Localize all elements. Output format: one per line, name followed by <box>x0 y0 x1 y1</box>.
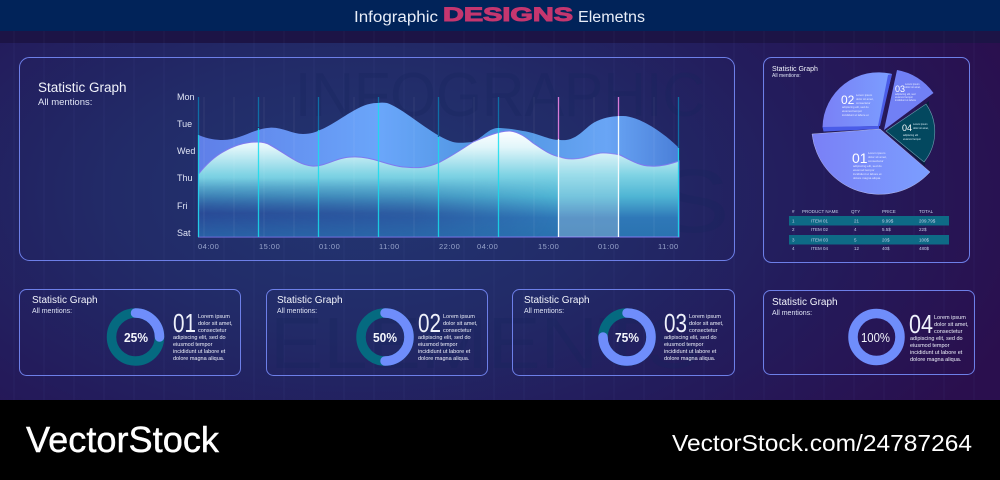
faint grid lines <box>204 97 654 237</box>
front area series <box>198 131 679 237</box>
donut 100% <box>853 314 900 360</box>
panel: statistic 02: All mentions: <box>277 308 317 315</box>
number and description <box>418 308 478 362</box>
data table: 100$ <box>919 238 930 242</box>
panel: statistic 04: All mentions: <box>772 310 812 317</box>
vertical time markers <box>198 97 678 237</box>
slice 01: Lorem ipsum <box>868 151 886 155</box>
number and description: Lorem ipsum <box>443 314 475 320</box>
y axis day labels <box>177 92 195 238</box>
slice 01: dolor sit amet, <box>868 155 887 159</box>
number and description <box>909 309 969 363</box>
data table: 209.79$ <box>919 218 936 224</box>
number and description: incididunt ut labore et <box>910 350 963 356</box>
header title: Infographic: Infographic <box>354 9 438 26</box>
x axis time labels: 01:00 <box>598 242 619 251</box>
data table: ITEM 04 <box>811 246 829 251</box>
data table: 9.99$ <box>882 218 894 224</box>
ghost background lettering: INFOGRAPHIC <box>295 61 705 130</box>
slice 03: 03 <box>895 84 905 94</box>
slice 02: Lorem ipsum <box>856 93 873 97</box>
data table: 1 <box>792 218 795 224</box>
number and description: dolor sit amet, <box>443 321 478 327</box>
slice 02: 02 <box>841 93 855 107</box>
heading: statistic graph: Statistic Graph <box>38 80 127 95</box>
number and description: Lorem ipsum <box>934 315 966 321</box>
footer brand: VectorStock <box>26 419 220 460</box>
number and description: incididunt ut labore et <box>664 349 717 355</box>
number and description: adipiscing elit, sed do <box>418 335 471 341</box>
number and description: consectetur <box>934 329 963 335</box>
x axis time labels: 15:00 <box>538 242 559 251</box>
slice 03 <box>884 70 934 130</box>
slice 03: Lorem ipsum <box>905 83 919 86</box>
y axis day labels: Wed <box>177 146 195 156</box>
data table: 12 <box>854 246 860 251</box>
number and description: 02 <box>418 308 441 338</box>
number and description: Lorem ipsum <box>198 314 230 320</box>
number and description: dolor sit amet, <box>198 321 233 327</box>
panel: statistic 01 <box>20 290 240 376</box>
subheading: all mentions: All mentions: <box>38 97 92 108</box>
number and description: dolor sit amet, <box>934 322 969 328</box>
ghost background lettering: DESIGNS <box>230 152 730 252</box>
slice 01: incididunt ut labore et <box>853 172 882 176</box>
data table <box>789 209 949 251</box>
footer url: VectorStock.com/24787264 <box>672 430 972 456</box>
slice 01: 01 <box>852 150 868 166</box>
number and description: dolore magna aliqua. <box>418 356 470 362</box>
panel: statistic 02 <box>266 290 488 376</box>
donut 25% <box>112 313 160 361</box>
y axis day labels: Tue <box>177 119 192 129</box>
x axis time labels: 11:00 <box>379 242 400 251</box>
data table: PRODUCT NAME <box>802 209 838 214</box>
donut 75% <box>603 313 651 361</box>
slice 04: adipiscing elit <box>903 134 918 137</box>
number and description: 01 <box>173 308 196 338</box>
highlighted section <box>559 153 618 237</box>
data table: PRICE <box>882 209 896 214</box>
lower shading <box>198 180 532 237</box>
x axis time labels: 11:00 <box>658 242 679 251</box>
slice 01: consectetur <box>868 159 884 163</box>
data table: 4 <box>854 227 857 232</box>
slice 04: dolor sit amet, <box>913 127 929 130</box>
data table: # <box>792 209 795 214</box>
slice 01: adipiscing elit, sed do <box>853 164 882 168</box>
x axis time labels: 04:00 <box>477 242 498 251</box>
slice 01: eiusmod tempor <box>853 168 875 172</box>
panel: statistic 03: All mentions: <box>524 308 564 315</box>
table row highlights <box>789 216 949 244</box>
slice 01: dolore magna aliqua. <box>853 176 881 180</box>
header title: Elemetns: Elemetns <box>578 9 645 26</box>
x axis time labels: 01:00 <box>319 242 340 251</box>
data table: QTY <box>851 209 860 214</box>
data table: 5 <box>854 238 857 242</box>
data table: 3 <box>792 238 795 242</box>
panel: statistic 03: Statistic Graph <box>524 295 590 306</box>
data table: 4 <box>792 246 795 251</box>
donut 100%: 100% <box>861 331 890 345</box>
slice 04: Lorem ipsum <box>913 123 927 126</box>
data table: 21 <box>854 218 860 224</box>
number and description: incididunt ut labore et <box>418 349 471 355</box>
data table: 2 <box>792 227 795 232</box>
panel: statistic 02: Statistic Graph <box>277 295 343 306</box>
number and description: consectetur <box>198 328 227 334</box>
y axis day labels: Fri <box>177 201 188 211</box>
panel: main statistic graph <box>20 58 734 260</box>
donut 50%: 50% <box>373 330 397 345</box>
data table: 22$ <box>919 227 927 232</box>
number and description <box>173 308 233 362</box>
donut 25%: 25% <box>124 330 148 345</box>
panel: statistic 01: All mentions: <box>32 308 72 315</box>
data table: ITEM 02 <box>811 227 829 232</box>
slice 04 <box>886 101 935 166</box>
x axis time labels: 15:00 <box>259 242 280 251</box>
data table: 480$ <box>919 246 930 251</box>
number and description <box>664 308 724 362</box>
ghost background lettering <box>230 61 730 384</box>
number and description: eiusmod tempor <box>418 342 458 348</box>
slice 03: incididunt ut labore <box>895 99 917 102</box>
header bar <box>0 0 1000 31</box>
data table: ITEM 03 <box>811 238 829 242</box>
number and description: eiusmod tempor <box>173 342 213 348</box>
donut 75%: 75% <box>615 330 639 345</box>
data table: TOTAL <box>919 209 934 214</box>
number and description: consectetur <box>689 328 718 334</box>
panel: statistic 03 <box>512 290 734 376</box>
donut 50% <box>361 313 409 361</box>
y axis day labels: Thu <box>177 173 193 183</box>
x axis time labels: 22:00 <box>439 242 460 251</box>
back area series <box>198 103 679 237</box>
number and description: adipiscing elit, sed do <box>910 336 963 342</box>
slice 04: 04 <box>902 123 912 133</box>
panel: statistic 04 <box>764 290 974 374</box>
number and description: Lorem ipsum <box>689 314 721 320</box>
number and description: incididunt ut labore et <box>173 349 226 355</box>
data table: 40$ <box>882 246 890 251</box>
data table: ITEM 01 <box>811 218 829 224</box>
number and description: dolore magna aliqua. <box>910 357 962 363</box>
y axis day labels: Mon <box>177 92 195 102</box>
number and description: dolor sit amet, <box>689 321 724 327</box>
subheading: all mentions: All mentions: <box>772 73 801 79</box>
number and description: dolore magna aliqua. <box>664 356 716 362</box>
slice 02: adipiscing elit, sed do <box>842 105 869 109</box>
slice 03: dolor sit amet, <box>905 86 921 89</box>
slice 03: eiusmod tempor <box>895 96 913 99</box>
slice 02: dolor sit amet, <box>856 97 874 101</box>
number and description: eiusmod tempor <box>910 343 950 349</box>
slice 02 <box>822 72 892 132</box>
header title: DESIGNS: DESIGNS <box>443 5 573 26</box>
panel: statistic 01: Statistic Graph <box>32 295 98 306</box>
ghost background lettering: ELEMENTS <box>270 304 700 384</box>
number and description: consectetur <box>443 328 472 334</box>
slice 02: incididunt ut labore et <box>842 113 869 117</box>
slice 02: consectetur <box>856 101 871 105</box>
number and description: adipiscing elit, sed do <box>664 335 717 341</box>
x axis time labels <box>198 242 679 251</box>
number and description: adipiscing elit, sed do <box>173 335 226 341</box>
panel: statistic 04: Statistic Graph <box>772 297 838 308</box>
number and description: eiusmod tempor <box>664 342 704 348</box>
footer bar <box>0 400 1000 480</box>
y axis day labels: Sat <box>177 228 191 238</box>
heading: statistic graph: Statistic Graph <box>772 66 818 73</box>
slice 04: eiusmod tempor <box>903 138 921 141</box>
number and description: 04 <box>909 309 933 339</box>
number and description: dolore magna aliqua. <box>173 356 225 362</box>
pie chart <box>812 70 935 194</box>
slice 01 <box>812 129 930 194</box>
background <box>0 31 1000 400</box>
panel: pie chart and table <box>764 58 970 262</box>
data table: 5.5$ <box>882 227 891 232</box>
number and description: 03 <box>664 308 687 338</box>
data table: 20$ <box>882 238 890 242</box>
slice 03: adipiscing elit, sed <box>895 93 916 96</box>
x axis time labels: 04:00 <box>198 242 219 251</box>
area chart <box>198 97 679 237</box>
slice 02: eiusmod tempor <box>842 109 862 113</box>
